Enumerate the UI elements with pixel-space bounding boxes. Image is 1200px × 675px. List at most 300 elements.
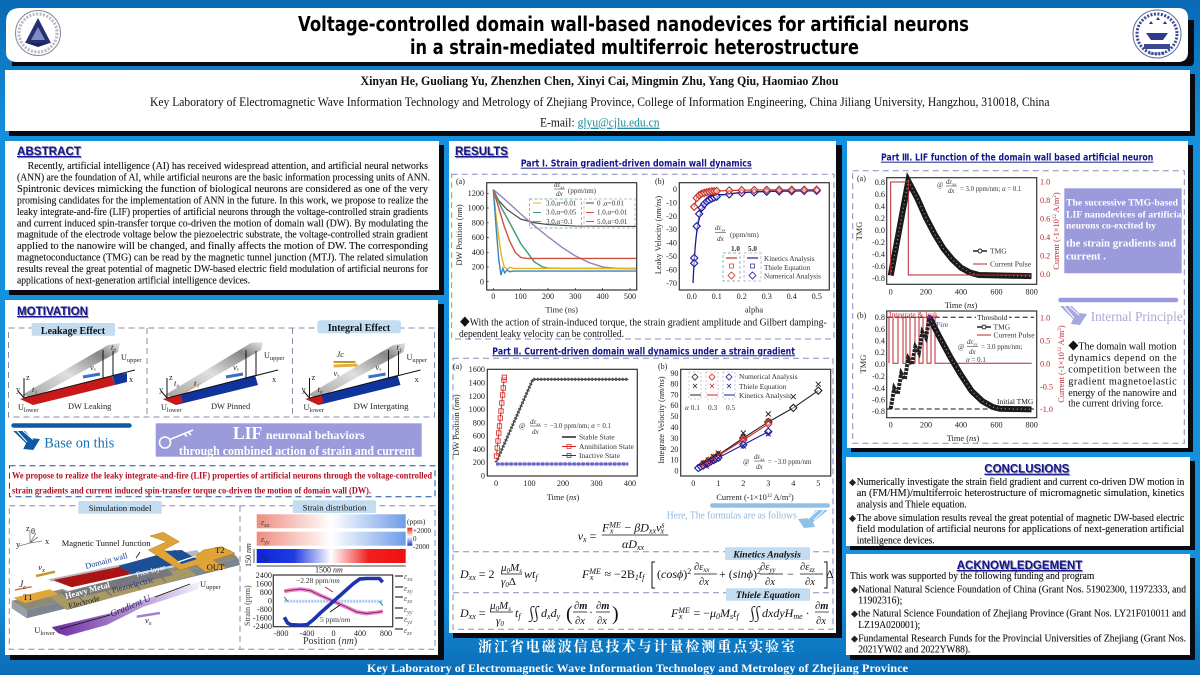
chart: leaky velocity vs alpha (I-b): -20: [666, 212, 677, 221]
equation: thiele Dxx: ∂m: [574, 601, 587, 612]
dashed divider: kinetics: [453, 551, 833, 553]
diagram: DW pinned: upper: [270, 355, 285, 362]
equation: thiele F: ·: [803, 606, 810, 620]
chart: DW position vs time (I-a): 100: [514, 292, 527, 301]
chart: TMG single pulse (III-a): 0: [889, 288, 893, 296]
diagram: DW integrating: y: [302, 385, 306, 394]
chart: TMG pulse train (III-b): 800: [1026, 420, 1038, 430]
chart: TMG pulse train (III-b): Threshold: [977, 313, 1008, 322]
chart: integrate velocity vs current (II-b): 40: [670, 423, 678, 432]
equation: kinetics Dxx: xx: [468, 573, 476, 582]
chart: strain vs position: 0: [331, 629, 336, 638]
diagram: DW leaking: y: [16, 385, 21, 394]
equation: kinetics Dxx: 0: [507, 567, 511, 575]
equation: kinetics F: ≈ −2B: [601, 567, 635, 581]
chart: TMG pulse train (III-b): Fire: [936, 320, 949, 329]
equation: thiele F: x: [678, 612, 683, 621]
abstract body text: promising candidates for the implementation of ANN in the future. In this work, we propose to realize the: [17, 194, 428, 206]
diagram: DW leaking: z: [26, 373, 30, 382]
diagram: DW leaking: t₁: [32, 385, 37, 394]
chart: strain vs position: −2.28 ppm/nm: [296, 576, 340, 585]
chart: TMG single pulse (III-a): 0.0: [1040, 270, 1050, 279]
chart: integrate velocity vs current (II-b): 1: [716, 479, 720, 488]
legend: II-b: [685, 372, 798, 412]
chart: TMG single pulse (III-a): 0.0: [875, 226, 885, 235]
footer: Chinese laboratory name: 浙江省电磁波信息技术与计量检测重点实验室: [478, 637, 795, 657]
equation: thiele Dxx: x: [546, 612, 551, 621]
chart: TMG pulse train (III-b): Integrate & leak: [889, 310, 938, 319]
chart: integrate velocity vs current (II-b): 60: [670, 401, 678, 410]
logo: EWITM laboratory: EWITM: [1149, 51, 1165, 56]
chart: strain vs position: xx: [406, 577, 413, 583]
equation: velocity: x: [582, 535, 587, 544]
chart: TMG pulse train (III-b): 600: [990, 420, 1003, 430]
chart: strain heatmaps: [244, 514, 431, 575]
chart: DW position vs time (I-a): [455, 177, 637, 315]
legend: I-b: xx: [720, 228, 725, 232]
icon: key: [160, 430, 193, 448]
legend: I-b: (ppm/nm): [730, 231, 759, 239]
label: leakage effect: Leakage Effect: [41, 326, 106, 337]
chart: TMG single pulse (III-a): xx: [951, 182, 956, 186]
diagram: DW leaking: U: [18, 403, 24, 412]
chart: strain vs position: 5 ppm/nm: [320, 615, 351, 624]
chart: DW position vs time (I-a): 800: [472, 218, 484, 228]
title banner: [6, 8, 1194, 66]
chart: leaky velocity vs alpha (I-b): 0.2: [737, 292, 747, 301]
diagram: DW pinned: t₁: [194, 379, 199, 388]
equation: kinetics Dxx: M: [509, 562, 520, 574]
chart: integrate velocity vs current (II-b): 5: [816, 479, 820, 488]
diagram: DW leaking: vₓ: [90, 363, 96, 372]
equation: thiele Dxx: μ: [490, 600, 496, 612]
abstract body text: results reveal the great potential of magnetic DW-based electric field modulation of artificial neurons for: [17, 263, 428, 275]
chart: strain vs position: ε: [404, 572, 407, 581]
legend: I-a: 3.0,α=0.05: [546, 208, 577, 216]
diagram: DW integrating: DW Intergating: [354, 402, 409, 411]
chart: TMG single pulse (III-a): (a): [857, 174, 866, 183]
chart: strain vs position: Strain (ppm): [243, 585, 252, 626]
diagram: simulation model device: Domain wall: [84, 551, 129, 571]
label: leakage effect: [32, 323, 115, 337]
chart: leaky velocity vs alpha (I-b): -70: [666, 279, 677, 288]
diagram: simulation model device: θ: [31, 527, 35, 536]
chart: strain vs position: ε: [404, 584, 407, 593]
conclusions text: analysis and Thiele equation.: [857, 498, 967, 510]
footer: English laboratory name: Key Laboratory of Electromagnetic Wave Information Technology and Metrology of Zhejiang Province: [367, 661, 909, 675]
equation: thiele F: s: [730, 612, 733, 621]
dashed frames: model and strain: [9, 506, 435, 649]
chart: leaky velocity vs alpha (I-b): -40: [666, 238, 677, 248]
equation: velocity: ME: [608, 521, 621, 530]
equation: thiele F: ∬: [747, 605, 763, 624]
chart: TMG single pulse (III-a): Time (ns): [945, 301, 977, 310]
chart: TMG pulse train (III-b): [857, 310, 1066, 443]
legend: III-a: TMG: [990, 246, 1007, 256]
legend: I-b: Numerical Analysis: [764, 272, 821, 280]
chart: integrate velocity vs current (II-b): 50: [670, 412, 678, 421]
equation: thiele F: f: [737, 612, 741, 621]
label: strain distribution: [293, 500, 376, 513]
callout: successive TMG-based text: the strain gradients and: [1066, 238, 1176, 250]
chart: TMG pulse train (III-b): Initial TMG: [997, 397, 1034, 406]
equation: velocity: v: [656, 521, 662, 535]
equation: thiele F: F: [671, 606, 678, 620]
diagram: simulation model device: [12, 524, 240, 637]
equation: kinetics F: 2: [757, 567, 761, 576]
equation: velocity: xx: [636, 543, 645, 552]
chart: TMG single pulse (III-a): 400: [955, 288, 967, 296]
label: thiele equation: Thiele Equation: [736, 590, 800, 601]
logo: China Jiliang University: [16, 10, 60, 56]
equation: velocity: αD: [622, 537, 637, 551]
equation: kinetics F: [581, 562, 834, 588]
label: simulation model: Simulation model: [89, 503, 152, 513]
panel: motivation: [5, 300, 444, 660]
chart: leaky velocity vs alpha (I-b): alpha: [745, 306, 763, 315]
chart: strain vs position: 400: [354, 629, 366, 638]
equation: thiele Dxx: t: [515, 606, 518, 620]
chart: leaky velocity vs alpha (I-b): -60: [666, 266, 677, 274]
chart: TMG single pulse (III-a): -0.6: [872, 262, 885, 271]
equation: thiele F: ∂m: [815, 601, 828, 612]
diagram: DW pinned: x: [272, 375, 277, 384]
annotation: II-a condition: dε: [530, 418, 536, 426]
equation: thiele Dxx: s: [508, 605, 511, 613]
chart: DW position vs time (II-a): 1200: [469, 392, 485, 401]
equation: thiele Dxx: γ: [496, 615, 500, 627]
diagram: simulation model device: U: [34, 626, 40, 635]
equation: velocity: [578, 521, 668, 552]
text: part I note: [459, 316, 827, 340]
equation: thiele Dxx: ∬: [526, 605, 542, 624]
legend: III-a: [973, 246, 1032, 268]
diagram: simulation model device: x: [45, 537, 50, 546]
equation: kinetics F: t: [639, 567, 643, 581]
equation: thiele Dxx: ∂x: [575, 616, 585, 627]
diagram: DW integrating: vₓ: [334, 369, 340, 378]
callout: internal principle: [1058, 298, 1183, 325]
callout: base on this: [11, 423, 132, 452]
chart: strain vs position: -800: [273, 629, 289, 638]
chart: TMG pulse train (III-b): Time (ns): [947, 434, 979, 443]
chart: DW position vs time (II-a): (a): [453, 362, 462, 371]
chart: TMG single pulse (III-a): 2: [1053, 195, 1058, 198]
chart: DW position vs time (II-a): [452, 362, 637, 502]
chart: TMG single pulse (III-a): [855, 174, 1061, 310]
equation: velocity: v: [578, 529, 583, 543]
diagram: DW integrating: z: [312, 373, 316, 382]
diagram: DW leaking: lower: [24, 407, 39, 414]
chart: integrate velocity vs current (II-b): 70: [670, 390, 678, 400]
diagram: DW leaking: [16, 343, 142, 414]
annotation: II-a condition: [519, 418, 612, 436]
equation: kinetics F: 1: [635, 573, 639, 582]
chart: integrate velocity vs current (II-b): 0: [674, 466, 678, 476]
chart: TMG pulse train (III-b): 2: [1058, 328, 1063, 331]
legend: III-b: Current Pulse: [994, 330, 1035, 340]
chart: DW position vs time (I-a): 500: [624, 292, 636, 301]
equation: kinetics F: ∂ε: [800, 562, 809, 573]
chart: TMG single pulse (III-a): 0.4: [1040, 233, 1050, 242]
chart: strain vs position: -800: [257, 605, 272, 614]
chart: TMG pulse train (III-b): -0.6: [872, 396, 885, 404]
chart: TMG pulse train (III-b): -0.8: [872, 407, 885, 416]
chart: TMG single pulse (III-a): 0.2: [875, 214, 885, 223]
chart: TMG single pulse (III-a): @: [937, 182, 943, 189]
text: part I note: ◆With the action of strain-induced torque, the strain gradient amplitude and Gilbert damping-: [460, 316, 827, 329]
chart: DW position vs time (II-a): Time (ns): [547, 493, 579, 502]
chart: integrate velocity vs current (II-b): 90: [670, 369, 678, 378]
equation: kinetics F: yy: [768, 566, 776, 574]
chart: TMG single pulse (III-a): 0.6: [1040, 214, 1050, 224]
equation: kinetics F: −: [787, 567, 794, 581]
chart: DW position vs time (I-a): Time (ns): [545, 306, 578, 315]
chart: strain vs position: 2400: [256, 571, 272, 580]
chart: TMG single pulse (III-a): 200: [920, 288, 932, 296]
diagram: DW integrating: [302, 343, 428, 414]
chart: DW position vs time (II-a): 400: [624, 479, 636, 488]
proposal statement: strain gradients and current induced spin-transfer torque co-driven the motion of domain wall (DW).: [12, 485, 371, 496]
equation: kinetics F: zz: [808, 566, 815, 574]
legend: I-a: 0 ,α=0.01: [597, 200, 624, 208]
text: internal principle description: ◆The domain wall motion: [1068, 340, 1177, 352]
acknowledgement text: [850, 570, 1187, 656]
annotation: II-b condition: xx: [759, 456, 764, 462]
chart: TMG single pulse (III-a): A/m: [1052, 197, 1061, 214]
equation: thiele Dxx: 0: [500, 620, 504, 628]
legend: II-a: Inactive State: [579, 451, 621, 460]
conclusions text: ◆: [849, 515, 856, 523]
chart: DW position vs time (II-a): 0: [481, 472, 485, 480]
annotation: II-a condition: dx: [532, 428, 540, 436]
diagram: simulation model device: OUT: [207, 562, 225, 572]
chart: TMG pulse train (III-b): dε: [967, 338, 973, 346]
chart: strain vs position: yy: [406, 610, 413, 616]
chart: strain heatmaps: yy: [263, 540, 270, 546]
chart: strain vs position: -2400: [253, 622, 272, 631]
authors: Xinyan He, Guoliang Yu, Zhenzhen Chen, Xinyi Cai, Mingmin Zhu, Yang Qiu, Haomiao Zhou: [360, 74, 839, 88]
chart: TMG pulse train (III-b): -1.0: [1040, 405, 1053, 414]
diagram: DW pinned: U: [161, 403, 167, 412]
dashed frames: effects: [8, 328, 434, 417]
equation: kinetics F: (cosϕ): [657, 567, 687, 581]
diagram: DW pinned: [159, 342, 285, 414]
annotation: II-b condition: dε: [754, 453, 760, 461]
chart: TMG single pulse (III-a): -0.8: [872, 274, 885, 283]
equation: thiele Dxx: [459, 600, 619, 628]
diagram: simulation model device: J: [19, 579, 23, 589]
acknowledgement text: ◆: [851, 611, 858, 619]
equation: thiele Dxx: y: [556, 612, 561, 621]
annotation: II-b condition: dx: [756, 463, 764, 471]
chart: strain heatmaps: +2000: [413, 527, 431, 535]
legend: I-b: Kinetics Analysis: [764, 255, 815, 263]
chart: DW position vs time (I-a): 200: [542, 292, 554, 301]
legend: I-a: [530, 181, 635, 228]
chart: TMG pulse train (III-b): Current (-1×10: [1057, 352, 1066, 403]
equation: thiele Dxx: f: [518, 612, 522, 621]
callout: formulas: Here, The formulas are as follows: [667, 510, 797, 521]
callout: successive TMG-based text: [1064, 188, 1182, 273]
chart: integrate velocity vs current (II-b): 20: [670, 445, 678, 454]
legend: I-b: 1.0: [731, 245, 740, 253]
equation: velocity: F: [602, 521, 609, 535]
chart: TMG pulse train (III-b): (b): [857, 311, 867, 320]
equation: kinetics F: x: [589, 573, 594, 582]
chart: strain heatmaps: 0: [413, 535, 417, 543]
chart: TMG pulse train (III-b): A/m: [1057, 330, 1066, 347]
text: part I note: dependent leaky velocity can be controlled.: [459, 329, 624, 340]
heading: motivation: MOTIVATION: [17, 306, 88, 318]
chart: DW position vs time (II-a): 400: [473, 445, 485, 454]
chart: strain heatmaps: 1500 nm: [315, 566, 343, 575]
diagram: DW leaking: t₀: [111, 343, 116, 352]
callout: LIF neuronal behaviors: LIF neuronal behaviors: [233, 423, 365, 443]
chart: TMG pulse train (III-b): 0.0: [875, 360, 885, 369]
callout: LIF neuronal behaviors: [156, 423, 422, 458]
diagram: DW integrating: t₀: [318, 385, 323, 394]
legend: II-a: Stable State: [579, 432, 615, 442]
label: integral effect: Integral Effect: [328, 323, 391, 334]
chart: TMG pulse train (III-b): 12: [1058, 347, 1063, 352]
diagram: simulation model device: x: [41, 568, 45, 574]
chart: DW position vs time (I-a): 300: [569, 292, 581, 301]
chart: TMG pulse train (III-b): xx: [972, 342, 977, 346]
diagram: DW integrating: vₓ: [376, 363, 382, 372]
affiliation: Key Laboratory of Electromagnetic Wave Information Technology and Metrology of Zhejiang Province, College of Information Engineering, China Jiliang University, Hangzhou, 310018, China: [150, 95, 1050, 109]
equation: kinetics Dxx: γ: [501, 576, 505, 588]
abstract body text: magnitude of the electrode voltage below the piezoelectric substrate, the voltage-controlled strain gradient: [17, 229, 428, 241]
annotation: II-b condition: @: [743, 458, 750, 466]
heading: results: RESULTS: [455, 144, 508, 158]
equation: thiele Dxx: (: [566, 603, 573, 625]
equation: velocity: −: [621, 521, 634, 535]
diagram: simulation model device: v: [145, 615, 149, 625]
callout: successive TMG-based text: LIF nanodevices of artificia: [1066, 209, 1182, 220]
dashed frame: part III: [853, 171, 1184, 443]
equation: kinetics F: ∂x: [699, 577, 709, 588]
equation: kinetics F: 2: [687, 567, 691, 576]
dashed frame: part II: [453, 358, 833, 629]
callout: successive TMG-based text: The successive TMG-based: [1066, 198, 1179, 209]
equation: thiele Dxx: 0: [496, 605, 500, 613]
diagram: simulation model device: Heavy Metal: [64, 580, 111, 601]
chart: TMG single pulse (III-a): 600: [990, 288, 1003, 296]
chart: DW position vs time (I-a): 200: [472, 263, 484, 272]
heading: acknowledgement: ACKNOWLEDGEMENT: [957, 558, 1083, 572]
chart: TMG pulse train (III-b): 0.8: [875, 313, 885, 322]
abstract body text: and current induced spin-transfer torque co-driven the motion of domain wall (DW). By modulating the: [17, 217, 428, 229]
text: internal principle description: dynamics depend on the: [1068, 353, 1177, 364]
legend: I-a: dε: [554, 181, 560, 189]
diagram: DW integrating: upper: [412, 357, 428, 364]
chart: TMG single pulse (III-a): = 3.0 ppm/nm; α = 0.1: [960, 186, 1021, 193]
label: simulation model: [78, 501, 162, 514]
legend: I-a: 1.0,α=0.01: [597, 208, 628, 216]
equation: thiele Dxx: M: [498, 600, 509, 612]
diagram: DW pinned: t₀: [174, 379, 179, 388]
equation: kinetics Dxx: wt: [524, 567, 535, 581]
equation: velocity: x: [659, 527, 664, 536]
diagram: DW pinned: DW Pinned: [211, 402, 251, 411]
diagram: simulation model device: T2: [215, 545, 224, 555]
chart: TMG pulse train (III-b): @: [958, 343, 965, 351]
acknowledgement text: 2021YW02 and 2022YW88).: [858, 644, 970, 656]
chart: TMG single pulse (III-a): TMG: [855, 222, 864, 240]
chart: DW position vs time (II-a): 1400: [469, 378, 485, 388]
chart: strain vs position: yz: [406, 620, 413, 626]
diagram: simulation model device: upper: [206, 584, 221, 591]
diagram: DW pinned: y: [159, 385, 164, 394]
equation: velocity: βD: [634, 521, 649, 535]
chart: integrate velocity vs current (II-b): ): [791, 493, 794, 502]
chart: strain vs position: ε: [404, 605, 407, 614]
legend: I-a: 5.0,α=0.01: [597, 218, 628, 226]
equation: kinetics Dxx: 0: [505, 581, 509, 589]
chart: leaky velocity vs alpha (I-b): Leaky Velocity (nm/ns): [654, 196, 663, 274]
acknowledgement text: LZ19A020001);: [858, 619, 920, 631]
annotation: II-a condition: @: [519, 422, 526, 430]
diagram: simulation model device: Magnetic Tunnel Junction: [62, 538, 151, 548]
chart: strain heatmaps: (ppm): [407, 517, 426, 526]
diagram: simulation model device: c: [23, 585, 26, 591]
diagram: DW pinned: z: [169, 373, 173, 382]
chart: strain heatmaps: ε: [261, 552, 264, 561]
chart: TMG pulse train (III-b): TMG: [859, 355, 868, 373]
label: strain distribution: Strain distribution: [303, 502, 367, 512]
equation: thiele F: μ: [710, 606, 716, 620]
chart: DW position vs time (I-a): 0: [480, 277, 484, 286]
equation: thiele Dxx: d: [551, 606, 558, 620]
chart: integrate velocity vs current (II-b): Integrate Velocity (nm/ns): [657, 376, 666, 464]
panel: LIF function (part III): [847, 141, 1193, 452]
equation: thiele Dxx: d: [541, 606, 547, 620]
chart: leaky velocity vs alpha (I-b): 0.3: [762, 292, 772, 301]
chart: leaky velocity vs alpha (I-b): -10: [666, 198, 677, 208]
text: internal principle description: gradient magnetoelastic: [1068, 376, 1177, 387]
diagram: simulation model device: U: [200, 580, 206, 589]
heading: conclusions: CONCLUSIONS: [984, 462, 1069, 476]
legend: I-a: 3.0,α=0.01: [546, 200, 577, 208]
equation: thiele Dxx: =: [476, 606, 486, 620]
callout: successive TMG-based text: neurons co-excited by: [1066, 221, 1156, 232]
chart: DW position vs time (II-a): 200: [557, 479, 569, 488]
equation: thiele Dxx: xx: [468, 612, 476, 621]
acknowledgement text: ◆: [851, 586, 858, 594]
legend: II-b: α 0.1: [685, 403, 700, 412]
chart: TMG single pulse (III-a): 0.8: [1040, 196, 1050, 205]
callout: internal principle: Internal Principle: [1091, 310, 1183, 325]
diagram: DW leaking: DW Leaking: [68, 402, 112, 411]
chart: strain vs position: 0: [268, 596, 272, 606]
chart: TMG single pulse (III-a): 800: [1026, 288, 1038, 296]
heading: part II: Part Ⅱ. Current-driven domain wall dynamics under a strain gradient: [492, 346, 795, 357]
chart: leaky velocity vs alpha (I-b): -50: [666, 252, 677, 261]
legend: II-b: 0.5: [726, 403, 736, 412]
chart: strain vs position: ε: [404, 594, 407, 603]
proposal statement: We propose to realize the leaky integrate-and-fire (LIF) properties of artificial neurons through the voltage-controlled: [12, 470, 433, 481]
chart: TMG pulse train (III-b): 0: [889, 420, 893, 430]
chart: TMG single pulse (III-a): Current (-1×10: [1052, 219, 1061, 270]
legend: I-b: dx: [717, 235, 725, 243]
equation: kinetics F: ME: [588, 567, 601, 576]
chart: DW position vs time (I-a): DW Position (nm): [455, 204, 464, 266]
diagram: simulation model device: Gradient U: [109, 593, 154, 620]
diagram: simulation model device: x: [148, 621, 152, 627]
chart: TMG pulse train (III-b): 0.2: [875, 348, 885, 357]
chart: TMG single pulse (III-a): dx: [948, 188, 954, 195]
